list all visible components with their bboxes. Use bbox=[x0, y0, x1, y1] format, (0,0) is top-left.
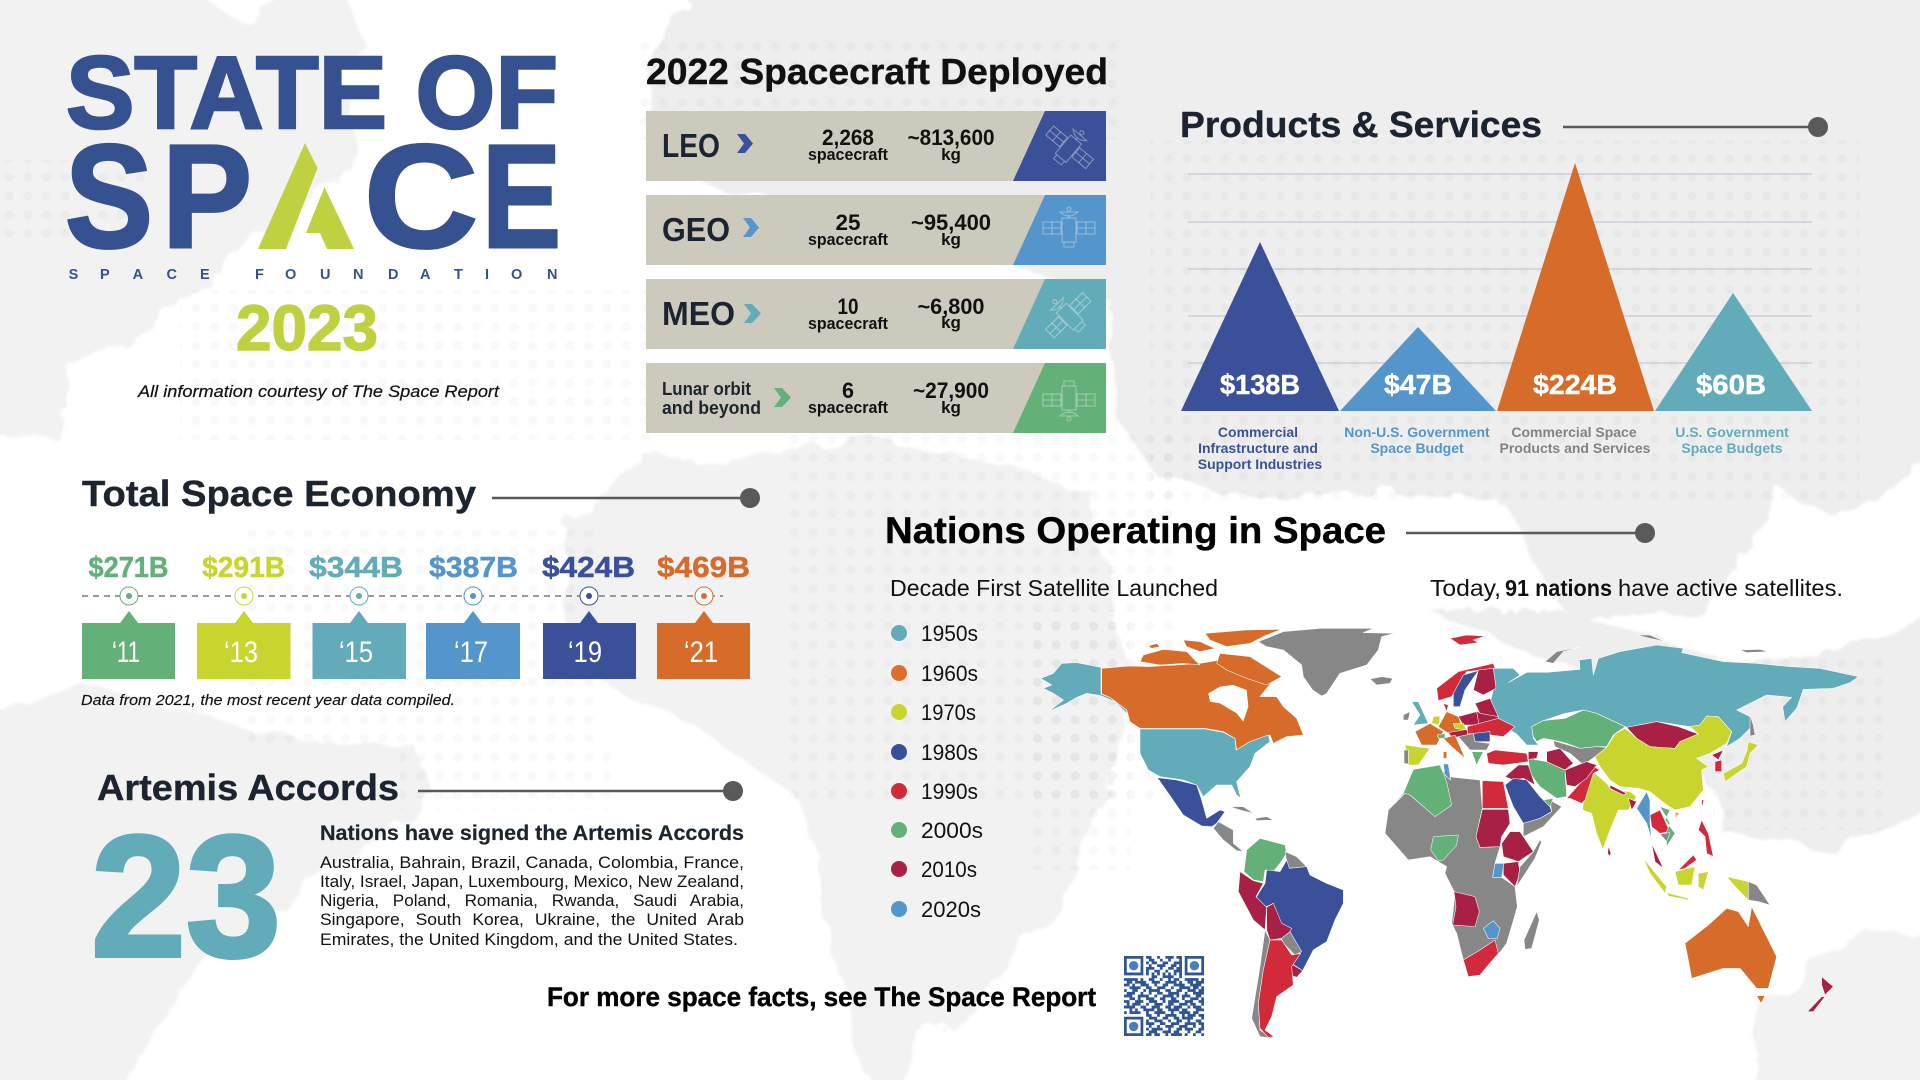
row: LEO: kg bbox=[941, 145, 961, 164]
milestone: 2019 bbox=[542, 552, 636, 679]
title line: Space bbox=[65, 115, 561, 279]
title line: Space: P bbox=[162, 115, 252, 279]
row: LEO: 2,268 bbox=[822, 125, 874, 150]
milestone: 2011 bbox=[82, 552, 175, 679]
panel: spacecraft by orbit bbox=[646, 111, 1106, 433]
heading: Artemis Accords bbox=[97, 767, 743, 808]
triangle: commercial infrastructure: $138B bbox=[1220, 369, 1300, 400]
milestone: 2017: $387B bbox=[429, 552, 518, 584]
QR code bbox=[1124, 957, 1204, 1035]
year: 2023 bbox=[236, 292, 378, 364]
heading: Total Space Economy: Total Space Economy bbox=[82, 473, 476, 514]
data note: Data from 2021, the most recent year data compiled. bbox=[81, 692, 455, 709]
heading: Nations Operating in Space: Nations Operating in Space bbox=[885, 510, 1386, 551]
row: GEO: 25 bbox=[836, 210, 860, 235]
triangle: US government budgets: U.S. Government bbox=[1675, 424, 1789, 440]
row: LEO: spacecraft bbox=[808, 145, 888, 164]
triangle: commercial infrastructure: Commercial bbox=[1218, 424, 1298, 440]
milestone: 2013 bbox=[197, 552, 290, 679]
title line: Space: E bbox=[482, 115, 561, 279]
triangle: non-US government budget: Non-U.S. Government bbox=[1344, 424, 1490, 440]
world map bbox=[1041, 628, 1858, 1038]
triangle: non-US government budget bbox=[1340, 327, 1496, 456]
milestone: 2019: ‘19 bbox=[568, 636, 602, 669]
heading: Artemis Accords: Artemis Accords bbox=[97, 767, 399, 808]
title line: State of: STATE OF bbox=[66, 35, 558, 150]
row: GEO: spacecraft bbox=[808, 230, 888, 249]
artemis accords text block bbox=[320, 822, 744, 949]
legend: decades: 2000s bbox=[921, 818, 983, 843]
milestone: 2015: $344B bbox=[309, 552, 403, 584]
triangle: US government budgets bbox=[1655, 293, 1812, 456]
row: Lunar orbit and beyond bbox=[646, 363, 1106, 433]
timeline: total space economy bbox=[82, 552, 750, 679]
callout: 91 nations: Today, bbox=[1430, 575, 1501, 601]
big number: 23 nations: 23 bbox=[91, 799, 281, 993]
artemis accords text block: Emirates, the United Kingdom, and the United States. bbox=[320, 930, 738, 949]
milestone: 2017 bbox=[426, 552, 520, 679]
triangle: non-US government budget: $47B bbox=[1384, 369, 1452, 400]
artemis accords text block: Nigeria, Poland, Romania, Rwanda, Saudi Arabia, bbox=[320, 891, 744, 910]
legend: decades: 1980s bbox=[921, 740, 978, 765]
row: LEO bbox=[646, 111, 1106, 181]
title line: Space: S bbox=[65, 115, 153, 279]
heading: Products & Services bbox=[1180, 104, 1828, 145]
call to action: For more space facts, see The Space Report bbox=[547, 982, 1096, 1012]
row: MEO: 10 bbox=[838, 294, 858, 319]
legend: decades bbox=[891, 621, 983, 922]
triangle: commercial products and services bbox=[1497, 163, 1654, 456]
title line: Space: C bbox=[364, 115, 478, 279]
triangle: US government budgets: Space Budgets bbox=[1681, 440, 1783, 456]
heading: 2022 Spacecraft Deployed: 2022 Spacecraft Deployed bbox=[646, 51, 1108, 92]
row: MEO: spacecraft bbox=[808, 314, 888, 333]
row: MEO: ~6,800 bbox=[918, 294, 984, 319]
row: Lunar orbit and beyond: spacecraft bbox=[808, 398, 888, 417]
milestone: 2017: ‘17 bbox=[454, 636, 488, 669]
triangle: commercial products and services: Products and Services bbox=[1500, 440, 1651, 456]
heading: Total Space Economy bbox=[82, 473, 760, 514]
row: GEO: ~95,400 bbox=[911, 210, 991, 235]
row: Lunar orbit and beyond: kg bbox=[941, 398, 961, 417]
source note: All information courtesy of The Space Report bbox=[137, 383, 501, 401]
callout: 91 nations bbox=[1430, 575, 1843, 601]
row: GEO bbox=[646, 195, 1106, 265]
milestone: 2015 bbox=[309, 552, 406, 679]
artemis accords text block: Nations have signed the Artemis Accords bbox=[320, 822, 744, 845]
triangle: US government budgets: $60B bbox=[1696, 369, 1766, 400]
triangle: commercial products and services: $224B bbox=[1533, 369, 1617, 400]
row: Lunar orbit and beyond: and beyond bbox=[662, 398, 761, 418]
legend: decades: 1970s bbox=[921, 700, 976, 725]
heading: Nations Operating in Space bbox=[885, 510, 1655, 551]
triangle: non-US government budget: Space Budget bbox=[1370, 440, 1464, 456]
triangle: commercial infrastructure: Support Industries bbox=[1198, 456, 1322, 472]
milestone: 2019: $424B bbox=[542, 552, 635, 584]
title: State of Space logo bbox=[65, 35, 561, 279]
legend: decades: 2010s bbox=[921, 857, 977, 882]
triangle: commercial products and services: Commercial Space bbox=[1511, 424, 1637, 440]
map: Europe, Africa, Asia, Oceania bbox=[1385, 635, 1858, 1012]
milestone: 2013: $291B bbox=[202, 552, 285, 584]
legend title: Decade First Satellite Launched bbox=[890, 575, 1218, 601]
milestone: 2021: $469B bbox=[657, 552, 750, 584]
milestone: 2021: ‘21 bbox=[684, 636, 718, 669]
artemis accords text block: Australia, Bahrain, Brazil, Canada, Colombia, France, bbox=[320, 853, 744, 872]
milestone: 2021 bbox=[657, 552, 750, 679]
legend: decades: 2020s bbox=[921, 897, 981, 922]
callout: 91 nations: have active satellites. bbox=[1618, 575, 1843, 601]
row: Lunar orbit and beyond: 6 bbox=[842, 378, 854, 403]
row: Lunar orbit and beyond: ~27,900 bbox=[913, 378, 989, 403]
row: LEO: LEO bbox=[662, 127, 720, 164]
logo subtitle: Space Foundation: SPACEFOUNDATION bbox=[69, 267, 557, 283]
artemis accords text block: Singapore, South Korea, Ukraine, the United Arab bbox=[320, 910, 744, 929]
row: MEO: MEO bbox=[662, 295, 735, 332]
artemis accords text block: Italy, Israel, Japan, Luxembourg, Mexico, New Zealand, bbox=[320, 872, 744, 891]
triangle: commercial infrastructure: Infrastructure and bbox=[1198, 440, 1318, 456]
row: GEO: GEO bbox=[662, 211, 730, 248]
legend: decades: 1960s bbox=[921, 661, 978, 686]
milestone: 2011: ‘11 bbox=[112, 636, 140, 669]
chart: products and services triangles bbox=[1181, 163, 1812, 472]
row: MEO bbox=[646, 279, 1106, 349]
callout: 91 nations: 91 nations bbox=[1505, 575, 1612, 601]
legend: decades: 1950s bbox=[921, 621, 978, 646]
milestone: 2015: ‘15 bbox=[339, 636, 373, 669]
heading: Products & Services: Products & Services bbox=[1180, 104, 1542, 145]
map: Americas bbox=[1041, 628, 1395, 1038]
triangle: commercial infrastructure bbox=[1181, 242, 1339, 472]
legend: decades: 1990s bbox=[921, 779, 978, 804]
row: LEO: ~813,600 bbox=[908, 125, 994, 150]
milestone: 2013: ‘13 bbox=[224, 636, 258, 669]
row: GEO: kg bbox=[941, 230, 961, 249]
milestone: 2011: $271B bbox=[88, 552, 168, 584]
row: Lunar orbit and beyond: Lunar orbit bbox=[662, 379, 751, 399]
row: MEO: kg bbox=[941, 313, 961, 332]
